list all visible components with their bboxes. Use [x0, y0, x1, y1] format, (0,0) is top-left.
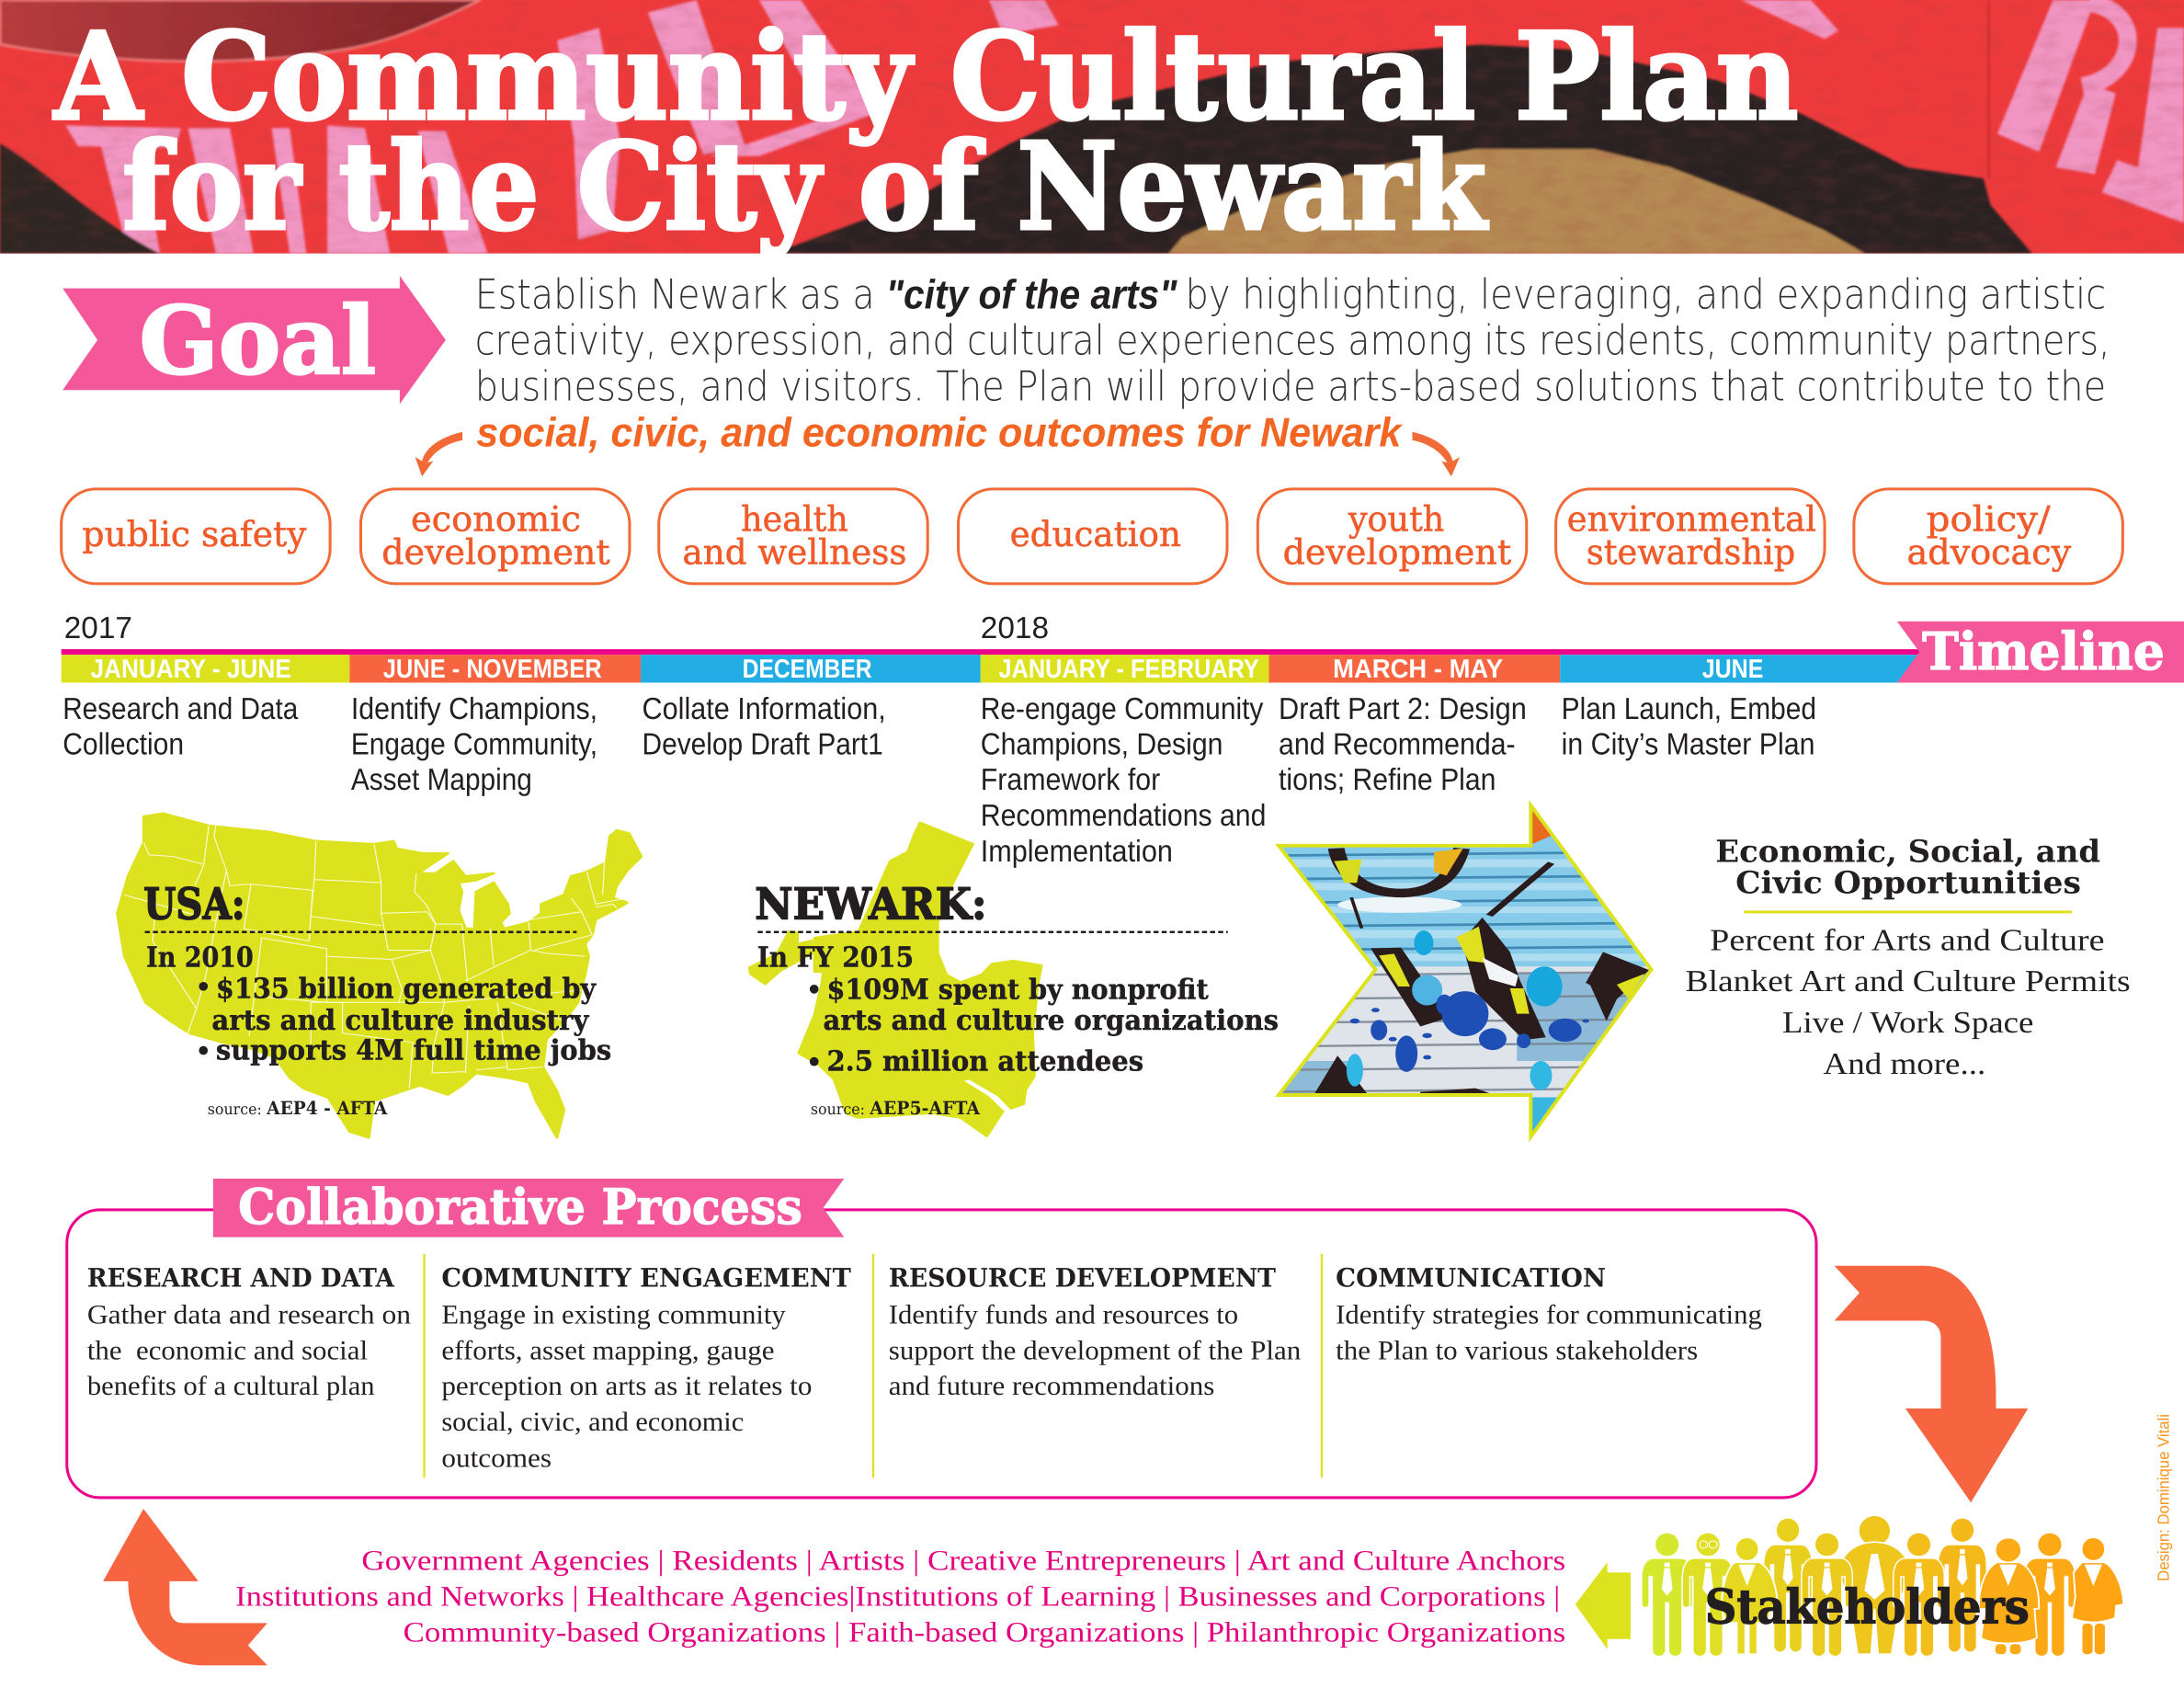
outcome pills: education: [1010, 514, 1181, 554]
timeline bar: DECEMBER: [743, 656, 872, 685]
column: communication: COMMUNICATION: [1336, 1264, 1606, 1294]
timeline descriptions: Develop Draft Part1: [643, 726, 883, 761]
goal statement: Establish Newark as a: [475, 271, 875, 318]
pale pink painted letters: [65, 0, 2184, 254]
Newark statistics: arts and culture organizations: [824, 1003, 1279, 1036]
timeline years: [64, 610, 1049, 645]
dark lower-left shape: [0, 143, 160, 254]
column: communication: Identify strategies for communicating: [1336, 1301, 1762, 1330]
icon: curved arrow left: [415, 432, 462, 476]
arrow: stakeholders to list: [1575, 1562, 1631, 1649]
panel: collaborative process: [67, 1179, 1816, 1498]
goal statement: [475, 271, 2110, 456]
timeline descriptions: Collection: [63, 726, 184, 761]
column: resource development: and future recommendations: [889, 1373, 1214, 1401]
banner: collaborative process: Collaborative Process: [238, 1180, 802, 1237]
column: communication: the Plan to various stakeholders: [1336, 1337, 1698, 1366]
opportunities panel: And more...: [1824, 1046, 1985, 1080]
title: for the City of Newark: [122, 117, 1489, 257]
arrow: stakeholders to process: [103, 1509, 267, 1665]
column: research and data: Gather data and research on: [87, 1301, 411, 1330]
goal statement: "city of the arts": [886, 272, 1178, 318]
USA statistics: USA:: [143, 880, 245, 930]
goal banner: Goal: [140, 286, 376, 395]
column: community engagement: Engage in existing community: [441, 1301, 786, 1330]
column: resource development: RESOURCE DEVELOPMENT: [889, 1264, 1276, 1294]
timeline descriptions: Identify Champions,: [351, 691, 597, 725]
stakeholder groups list: Institutions and Networks | Healthcare Agencies|Institutions of Learning | Businesses and Corporations |: [235, 1582, 1560, 1613]
timeline bar: JANUARY - JUNE: [90, 656, 291, 685]
outcome pills: economic: [411, 498, 581, 539]
outcome pills: stewardship: [1587, 532, 1795, 573]
USA statistics: In 2010: [146, 941, 254, 974]
timeline bar: MARCH - MAY: [1333, 656, 1503, 685]
outcome pills: and wellness: [683, 532, 906, 573]
outcome pills: environmental: [1567, 498, 1816, 539]
outcome pills: development: [1283, 532, 1511, 573]
outcome pills: health: [741, 498, 848, 539]
timeline descriptions: Plan Launch, Embed: [1562, 691, 1816, 725]
USA statistics: $135 billion generated by: [216, 972, 597, 1005]
outcome pills: development: [381, 532, 610, 573]
timeline descriptions: tions; Refine Plan: [1279, 762, 1496, 797]
tan shape: [1168, 149, 1865, 254]
title: A Community Cultural Plan: [53, 7, 1798, 148]
column: communication: [1336, 1264, 1762, 1366]
opportunities panel: Percent for Arts and Culture: [1710, 922, 2105, 957]
opportunities panel: [1686, 834, 2131, 1080]
opportunities panel: Blanket Art and Culture Permits: [1686, 964, 2131, 998]
timeline bar: JUNE: [1702, 656, 1763, 685]
front men: [1642, 1534, 2076, 1657]
outcome pills: youth: [1347, 498, 1444, 539]
column: community engagement: COMMUNITY ENGAGEMENT: [441, 1264, 851, 1294]
timeline years: 2017: [64, 610, 132, 645]
timeline descriptions: [63, 691, 1816, 869]
column: research and data: [87, 1264, 411, 1401]
opportunities panel: Civic Opportunities: [1735, 865, 2081, 901]
tall men behind: [1764, 1519, 1986, 1652]
Newark statistics: In FY 2015: [757, 941, 914, 974]
timeline descriptions: and Recommenda-: [1279, 726, 1516, 761]
timeline descriptions: Draft Part 2: Design: [1279, 691, 1527, 725]
timeline descriptions: in City’s Master Plan: [1562, 726, 1814, 761]
column: community engagement: perception on arts as it relates to: [441, 1373, 812, 1401]
stakeholder groups list: Government Agencies | Residents | Artists | Creative Entrepreneurs | Art and Culture Anchors: [361, 1546, 1565, 1577]
USA statistics: [143, 880, 611, 1120]
USA statistics: supports 4M full time jobs: [216, 1033, 611, 1066]
dark top-left shape: [0, 0, 481, 62]
shutter bands: [1291, 859, 1643, 962]
stakeholders label: Stakeholders: [1705, 1580, 2030, 1636]
Newark statistics: 2.5 million attendees: [826, 1044, 1143, 1078]
column: research and data: the economic and social: [87, 1337, 369, 1366]
outcome pills: [62, 489, 2122, 584]
timeline descriptions: Re-engage Community: [981, 691, 1263, 725]
timeline banner: Timeline: [1922, 621, 2165, 682]
timeline descriptions: Implementation: [981, 834, 1173, 869]
column: resource development: support the development of the Plan: [889, 1337, 1302, 1366]
column: resource development: Identify funds and resources to: [889, 1301, 1238, 1330]
stakeholder groups list: [235, 1546, 1565, 1648]
goal statement: social, civic, and economic outcomes for Newark: [476, 410, 1404, 456]
column: resource development: [889, 1264, 1302, 1401]
timeline descriptions: Champions, Design: [981, 726, 1223, 761]
column: research and data: RESEARCH AND DATA: [87, 1264, 395, 1294]
icon: curved arrow right: [1413, 432, 1460, 476]
stakeholder groups list: Community-based Organizations | Faith-based Organizations | Philanthropic Organizations: [404, 1618, 1565, 1648]
USA statistics: AEP4 - AFTA: [266, 1100, 389, 1120]
icon: stakeholders people group: [1642, 1516, 2123, 1657]
Newark map: [747, 823, 1041, 1136]
header photo banner: [0, 0, 2184, 254]
Newark statistics: source:: [811, 1101, 865, 1119]
Newark statistics: $109M spent by nonprofit: [826, 973, 1210, 1006]
title: [53, 7, 1798, 257]
outcome pills: public safety: [82, 514, 308, 554]
timeline descriptions: Asset Mapping: [351, 762, 532, 797]
outcome pills: advocacy: [1906, 532, 2073, 573]
dark band: [773, 44, 2032, 254]
timeline descriptions: Research and Data: [63, 691, 299, 725]
timeline descriptions: Engage Community,: [351, 726, 597, 761]
women: [1722, 1538, 2123, 1654]
column: community engagement: outcomes: [441, 1444, 552, 1474]
Newark statistics: NEWARK:: [755, 880, 987, 930]
timeline bar: JUNE - NOVEMBER: [383, 656, 602, 685]
timeline bar: JANUARY - FEBRUARY: [998, 656, 1259, 685]
timeline years: 2018: [981, 610, 1049, 645]
design credit: Design: Dominique Vitali: [2156, 1414, 2173, 1581]
large man: [1839, 1516, 1910, 1654]
timeline descriptions: Framework for: [981, 762, 1160, 797]
graffiti arrow: [1268, 799, 1662, 1141]
timeline descriptions: Collate Information,: [643, 691, 886, 725]
outcome pills: policy/: [1927, 498, 2051, 539]
USA statistics: arts and culture industry: [211, 1003, 590, 1036]
timeline bar: [62, 649, 1919, 685]
opportunities panel: Economic, Social, and: [1715, 834, 2100, 870]
timeline descriptions: Recommendations and: [981, 798, 1266, 833]
column: community engagement: [441, 1264, 851, 1474]
column: research and data: benefits of a cultural plan: [87, 1373, 375, 1401]
USA map: [118, 814, 642, 1137]
column: community engagement: efforts, asset mapping, gauge: [441, 1337, 775, 1366]
Newark statistics: [755, 880, 1279, 1120]
USA statistics: source:: [208, 1101, 262, 1119]
column: community engagement: social, civic, and economic: [441, 1409, 745, 1438]
Newark statistics: AEP5-AFTA: [869, 1100, 981, 1120]
goal banner: [63, 276, 446, 404]
opportunities panel: Live / Work Space: [1782, 1005, 2033, 1039]
arrow: process to stakeholders: [1835, 1266, 2028, 1502]
